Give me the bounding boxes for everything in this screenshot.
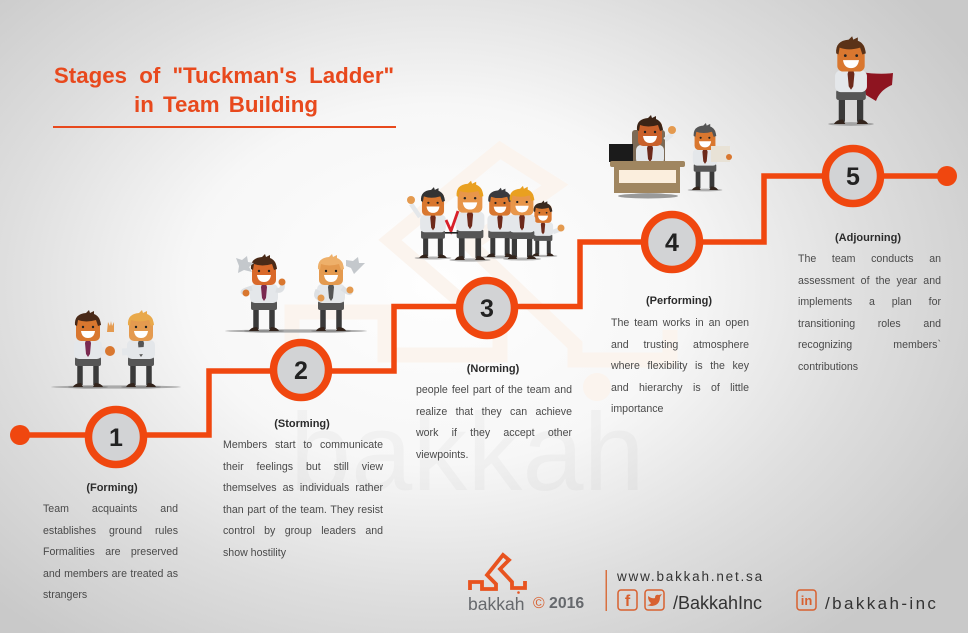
title: [54, 63, 394, 117]
scene 1: handshake: [51, 310, 181, 389]
scene 5: hero with cape: [828, 36, 893, 126]
step 1 text: and members are treated as: [43, 568, 178, 580]
footer linkedin handle: /bakkah-inc: [825, 594, 938, 613]
title: in Team Building: [134, 92, 318, 117]
step 4 text: The team works in an open: [611, 317, 749, 329]
step 1 heading: (Forming): [86, 482, 138, 494]
step 3 text: viewpoints.: [416, 449, 468, 461]
step 5 text: transitioning roles and: [798, 318, 941, 330]
watermark logo: [292, 150, 670, 394]
step 1 text: Formalities are preserved: [43, 546, 178, 558]
step 5 heading: (Adjourning): [835, 232, 901, 244]
step 5 badge: 5: [846, 163, 860, 191]
step 4 text: and trusting atmosphere: [611, 339, 749, 351]
step 1 badge: [88, 410, 144, 464]
footer facebook and twitter handle: /BakkahInc: [673, 593, 762, 613]
step 4 text: and hierarchy is of little: [611, 382, 749, 394]
step 3 badge: 3: [480, 295, 494, 323]
step 5 text: implements a plan for: [798, 296, 941, 308]
step 4 text: [611, 317, 749, 415]
icon: linkedin: in: [801, 593, 812, 608]
scene 2: storming argument: [225, 254, 367, 333]
footer brand name: bakkah: [468, 594, 524, 614]
scene 4: office desk: [609, 115, 732, 198]
step 2 text: control by group leaders and: [223, 525, 383, 537]
step 4 badge: [644, 214, 700, 270]
step 3 text: people feel part of the team and: [416, 384, 572, 396]
step 4 heading: (Performing): [646, 295, 712, 307]
step 1 text: establishes ground rules: [43, 525, 178, 537]
footer copyright: © 2016: [533, 595, 584, 612]
scene 3: norming group: [407, 181, 564, 262]
step 2 text: than part of the team. They resist: [223, 504, 383, 516]
step 4 text: importance: [611, 403, 663, 415]
step 5 text: [798, 253, 941, 373]
step 5 badge: [826, 148, 880, 204]
footer website: www.bakkah.net.sa: [617, 569, 764, 584]
step 1 badge: 1: [109, 424, 123, 452]
step 5 text: recognizing members`: [798, 339, 941, 351]
step 2 heading: (Storming): [274, 418, 330, 430]
footer divider: [606, 570, 607, 611]
step 2 badge: 2: [294, 357, 308, 385]
title: Stages of "Tuckman's Ladder": [54, 63, 394, 88]
step 2 badge: [274, 342, 328, 398]
icon: twitter: [645, 590, 664, 610]
step 5 text: The team conducts an: [798, 253, 941, 265]
step 4 badge: 4: [665, 229, 679, 257]
step 1 text: strangers: [43, 589, 87, 601]
step 3 badge: [460, 280, 514, 336]
step 1 text: Team acquaints and: [43, 503, 178, 515]
icon: facebook: [618, 590, 637, 610]
step 5 text: assessment of the year and: [798, 275, 941, 287]
step 5 text: contributions: [798, 361, 858, 373]
step 3 text: work if they accept other: [416, 427, 572, 439]
step 2 text: show hostility: [223, 547, 286, 559]
footer logo: [470, 555, 525, 594]
step 4 text: where flexibility is the key: [611, 360, 749, 372]
start point: [10, 425, 30, 445]
icon: facebook: f: [625, 593, 631, 610]
step 1 text: [43, 503, 178, 601]
step 2 text: Members start to communicate: [223, 439, 383, 451]
step 2 text: themselves as individuals rather: [223, 482, 383, 494]
icon: linkedin: [797, 590, 816, 610]
step 3 heading: (Norming): [467, 363, 519, 375]
watermark wordmark: bakkah: [290, 391, 645, 514]
step 3 text: realize that they can achieve: [416, 406, 572, 418]
title underline: [53, 126, 396, 128]
end point: [937, 166, 957, 186]
step 2 text: [223, 439, 383, 559]
step 2 text: their feelings but still view: [223, 461, 383, 473]
ladder path: [20, 176, 947, 435]
step 3 text: [416, 384, 572, 461]
